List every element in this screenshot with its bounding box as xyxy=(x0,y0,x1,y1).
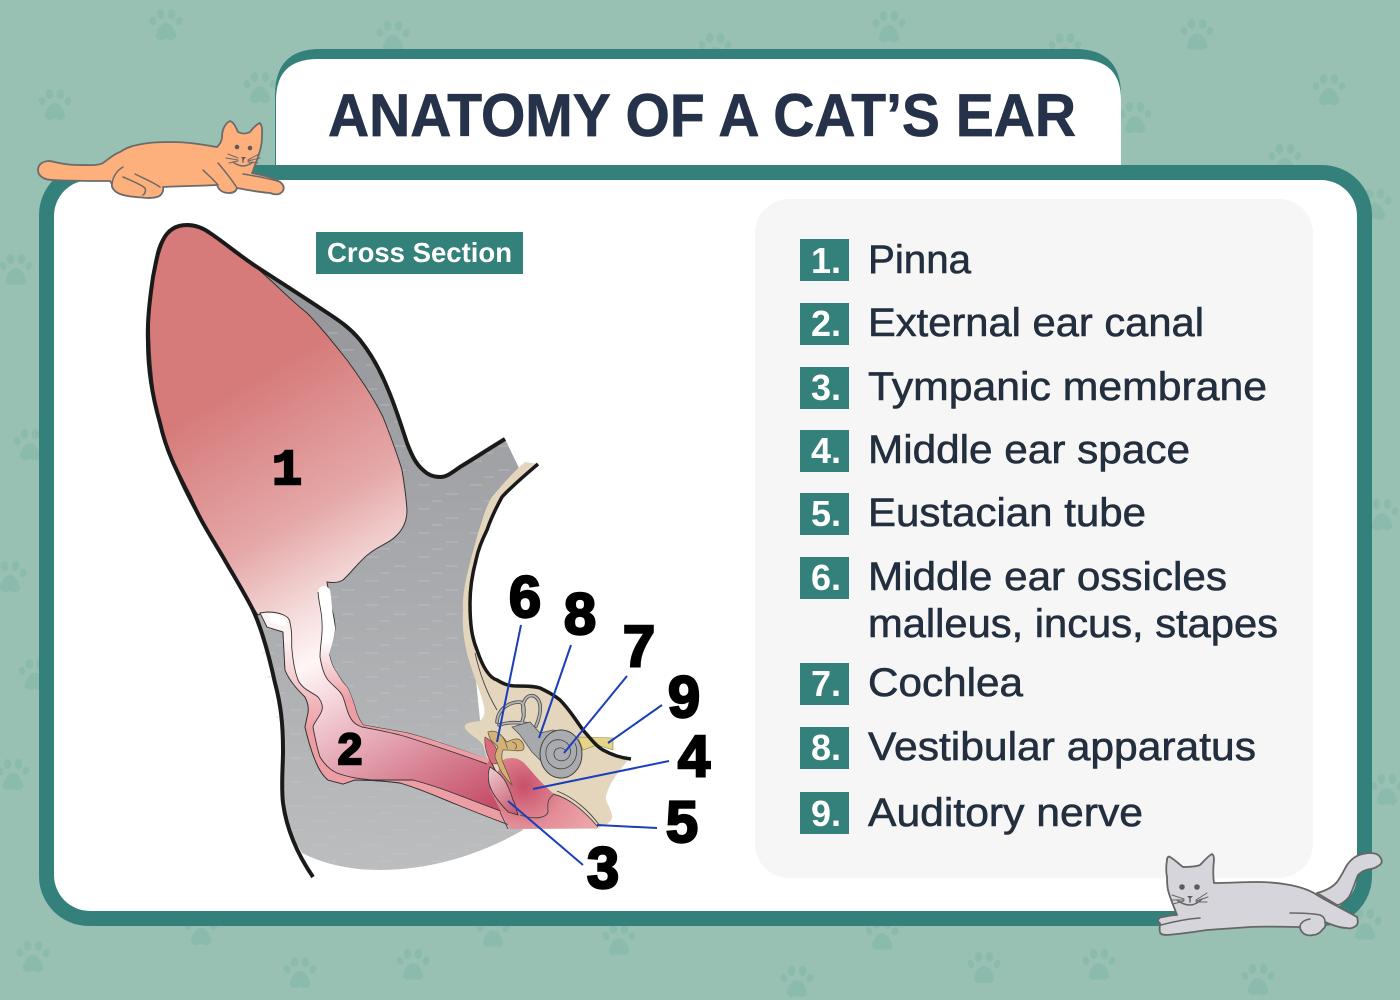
ear outline xyxy=(148,225,505,877)
9: auditory nerve xyxy=(578,737,613,750)
diagram numbers: 2 xyxy=(338,725,362,774)
item 3: 3. xyxy=(811,367,841,408)
item 8: 8. xyxy=(811,727,841,768)
diagram numbers: 6 xyxy=(509,565,541,630)
item 6 xyxy=(800,555,1278,646)
diagram numbers: 8 xyxy=(564,582,596,647)
7: cochlea xyxy=(540,730,582,778)
item 5: 5. xyxy=(811,493,841,534)
item 9: Auditory nerve xyxy=(868,791,1143,835)
icon: grey cat xyxy=(1158,853,1382,935)
canal lining lines xyxy=(318,592,487,764)
cross section tag xyxy=(316,232,523,274)
title tab xyxy=(275,49,1121,170)
diagram numbers: 3 xyxy=(587,836,619,901)
item 8: Vestibular apparatus xyxy=(868,725,1256,769)
item 1: Pinna xyxy=(868,238,972,282)
diagram numbers xyxy=(272,443,710,901)
upper canal lining xyxy=(320,623,490,764)
item 6: malleus, incus, stapes xyxy=(868,602,1278,646)
diagram numbers: 7 xyxy=(623,614,655,679)
item 7: 7. xyxy=(811,663,841,704)
diagram numbers: 5 xyxy=(666,790,698,855)
1: pinna and canal lumen xyxy=(149,226,518,823)
main card xyxy=(39,165,1372,926)
item 6: Middle ear ossicles xyxy=(868,555,1227,599)
leader lines xyxy=(497,625,669,865)
skull bone xyxy=(463,462,628,829)
diagram numbers: 4 xyxy=(678,724,710,789)
3: tympanic membrane xyxy=(488,767,518,815)
eustachian tube lines xyxy=(475,653,600,829)
surrounding tissue xyxy=(160,225,530,870)
item 5: Eustacian tube xyxy=(868,491,1146,535)
4: middle ear chamber xyxy=(490,758,598,829)
white lobe xyxy=(267,614,286,626)
item 2: External ear canal xyxy=(868,301,1204,345)
diagram numbers: 1 xyxy=(272,443,302,500)
6: ossicles xyxy=(488,731,524,785)
item 4: 4. xyxy=(811,430,841,471)
item 7: Cochlea xyxy=(868,661,1024,705)
item 6: 6. xyxy=(811,557,841,598)
cross section tag: Cross Section xyxy=(327,237,512,268)
item 7 xyxy=(800,661,1024,705)
item 2: 2. xyxy=(811,303,841,344)
title: ANATOMY OF A CAT’S EAR xyxy=(328,82,1076,149)
legend panel xyxy=(755,199,1313,878)
item 1: 1. xyxy=(811,240,841,281)
item 1 xyxy=(800,238,972,282)
8: vestibular apparatus xyxy=(497,696,567,765)
icon: orange cat xyxy=(38,121,284,198)
skull outline xyxy=(470,464,631,759)
item 3: Tympanic membrane xyxy=(868,365,1267,409)
item 4: Middle ear space xyxy=(868,428,1190,472)
item 9: 9. xyxy=(811,793,841,834)
lower canal lining xyxy=(260,612,512,826)
white groove xyxy=(318,586,335,655)
diagram numbers: 9 xyxy=(668,665,700,730)
ear anatomy diagram xyxy=(148,225,710,901)
